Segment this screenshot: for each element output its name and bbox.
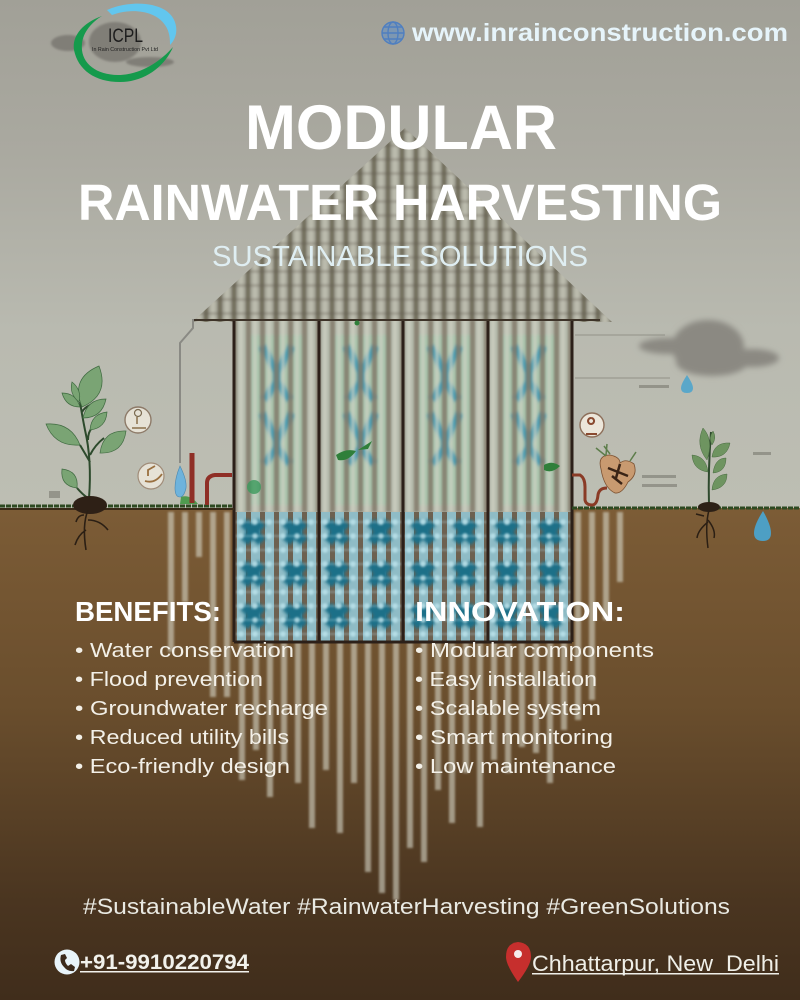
house [190, 125, 615, 642]
innovation list: • Easy installation [415, 668, 597, 691]
benefits list: • Reduced utility bills [75, 726, 289, 749]
benefits list: • Flood prevention [75, 668, 263, 691]
ground edge [0, 508, 234, 510]
innovation list: • Scalable system [415, 697, 601, 720]
left icon badges [125, 407, 164, 489]
background soil [0, 508, 800, 1000]
benefits heading: BENEFITS: [75, 596, 221, 627]
underground water tank [234, 512, 572, 642]
innovation heading: INNOVATION: [415, 596, 625, 627]
innovation list: • Modular components [415, 639, 654, 662]
benefits list: • Water conservation [75, 639, 294, 662]
rain drop under cloud [681, 375, 693, 393]
frame posts [234, 320, 572, 642]
storm cloud [639, 320, 779, 376]
wall stripes [234, 320, 572, 512]
icon: location pin [506, 942, 531, 982]
downspout, water tank and red pipes [175, 319, 232, 505]
lattice motifs [250, 335, 557, 505]
background sky [0, 0, 800, 508]
logo tagline: In Rain Construction Pvt Ltd [92, 47, 158, 53]
roof [190, 125, 615, 323]
right plant [692, 428, 730, 548]
benefits list: • Eco-friendly design [75, 755, 290, 778]
wall panels [234, 320, 572, 512]
website: www.inrainconstruction.com [411, 19, 788, 47]
green leaf accents [247, 320, 560, 494]
benefits list [75, 639, 328, 778]
subtitle: SUSTAINABLE SOLUTIONS [212, 241, 588, 273]
ground grass line [0, 506, 800, 508]
panel: innovation [415, 596, 654, 778]
panel: benefits [75, 596, 328, 778]
left plant [46, 366, 126, 550]
address: Chhattarpur, New Delhi [532, 951, 779, 976]
phone number: +91-9910220794 [80, 951, 249, 974]
logo cloud [51, 22, 174, 67]
faint illustration captions [49, 385, 771, 498]
ground water drop [754, 511, 771, 541]
innovation list: • Smart monitoring [415, 726, 613, 749]
title: modular: MODULAR [245, 93, 557, 163]
underground water drip columns [171, 512, 620, 900]
icon: globe [382, 22, 404, 44]
innovation list [415, 639, 654, 778]
icon: phone [54, 950, 80, 974]
logo [51, 4, 176, 82]
title: rainwater harvesting: RAINWATER HARVESTING [78, 174, 722, 231]
logo name: ICPL [108, 26, 143, 47]
hashtags: #SustainableWater #RainwaterHarvesting #GreenSolutions [83, 894, 730, 919]
benefits list: • Groundwater recharge [75, 697, 328, 720]
right pipe and bulb plant [572, 335, 670, 505]
blue swoosh [107, 4, 176, 45]
green swoosh [74, 16, 173, 82]
innovation list: • Low maintenance [415, 755, 616, 778]
